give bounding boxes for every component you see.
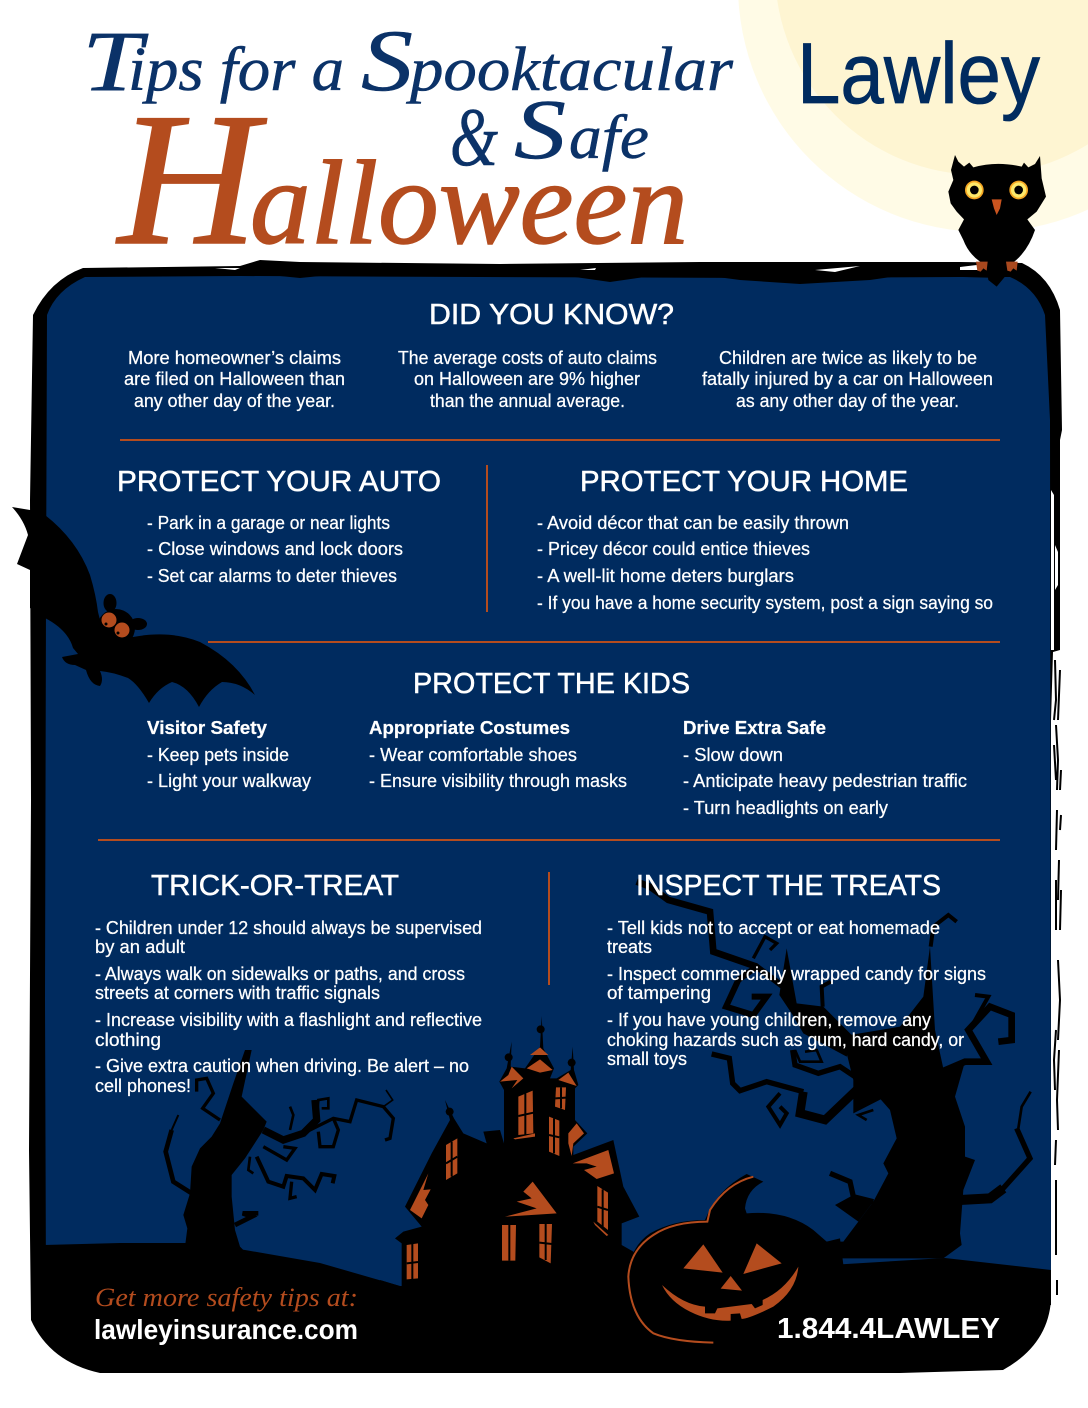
title: & [450,91,498,184]
footer: website call to action: lawleyinsurance.com [94,1314,358,1345]
column: drive extra safe [683,717,967,818]
list: trick-or-treat tips: - Always walk on sidewalks or paths, and cross [95,963,465,984]
list: auto tips: - Close windows and lock doors [147,538,403,559]
column: appropriate costumes [369,717,627,791]
title: H [115,75,267,285]
title: afe [569,104,649,172]
stat: children injured: as any other day of the year. [736,390,959,411]
title: T [82,13,148,109]
column: drive extra safe: - Anticipate heavy pedestrian traffic [683,770,967,791]
column: appropriate costumes: Appropriate Costumes [369,717,570,738]
heading: protect your auto: PROTECT YOUR AUTO [117,466,441,498]
owl [948,155,1046,287]
list: trick-or-treat tips: clothing [95,1029,161,1050]
list: auto tips [147,512,403,586]
column: drive extra safe: - Slow down [683,744,783,765]
jack-o-lantern pumpkin [627,1174,853,1353]
list: trick-or-treat tips [95,917,482,1096]
stat: homeowner claims: are filed on Halloween than [124,368,345,389]
column: visitor safety: - Light your walkway [147,770,312,791]
column: visitor safety: Visitor Safety [147,717,268,738]
column: visitor safety [147,717,312,791]
list: home tips: - A well-lit home deters burglars [537,565,794,586]
logo: Lawley: Lawley [797,26,1040,122]
column: visitor safety: - Keep pets inside [147,744,289,765]
title: S [361,13,413,110]
stat: auto claims: The average costs of auto claims [398,347,657,368]
heading: inspect the treats: INSPECT THE TREATS [636,870,941,902]
stat: auto claims: on Halloween are 9% higher [414,368,640,389]
haunted house [380,1016,647,1333]
list: auto tips: - Park in a garage or near lights [147,512,390,533]
list: trick-or-treat tips: - Children under 12 should always be supervised [95,917,482,938]
column: drive extra safe: - Turn headlights on early [683,797,889,818]
list: inspect the treats tips: - If you have young children, remove any [607,1009,932,1030]
stat: children injured [702,347,993,411]
stat: auto claims: than the annual average. [430,390,625,411]
column: appropriate costumes: - Wear comfortable shoes [369,744,577,765]
column: appropriate costumes: - Ensure visibility through masks [369,770,627,791]
stat: homeowner claims: any other day of the year. [134,390,335,411]
list: trick-or-treat tips: by an adult [95,936,185,957]
stat: auto claims [398,347,657,411]
list: trick-or-treat tips: - Give extra caution when driving. Be alert – no [95,1055,469,1076]
list: auto tips: - Set car alarms to deter thieves [147,565,397,586]
panel: blue board with rough black border [29,260,1062,1373]
left tree silhouette [166,1050,393,1253]
list: home tips: - Pricey décor could entice thieves [537,538,810,559]
list: inspect the treats tips: small toys [607,1048,687,1069]
footer: website call to action: Get more safety tips at: [95,1283,358,1312]
list: inspect the treats tips: - Tell kids not to accept or eat homemade [607,917,940,938]
stat: homeowner claims [124,347,345,411]
heading: protect the kids: PROTECT THE KIDS [413,668,690,700]
stat: children injured: Children are twice as likely to be [719,347,977,368]
column: drive extra safe: Drive Extra Safe [683,717,826,738]
heading: protect your home: PROTECT YOUR HOME [580,466,908,498]
list: trick-or-treat tips: cell phones! [95,1075,191,1096]
stat: homeowner claims: More homeowner’s claims [128,347,341,368]
list: home tips [537,512,993,613]
list: inspect the treats tips: of tampering [607,982,711,1003]
title [82,13,734,285]
list: home tips: - If you have a home security system, post a sign saying so [537,592,993,613]
heading: trick-or-treat: TRICK-OR-TREAT [151,870,399,902]
list: trick-or-treat tips: streets at corners with traffic signals [95,982,380,1003]
title: S [514,81,566,177]
footer: phone number: 1.844.4LAWLEY [777,1313,1000,1345]
list: inspect the treats tips: choking hazards such as gum, hard candy, or [607,1029,964,1050]
title: ips for a [128,36,344,104]
title: alloween [250,136,688,269]
bat [12,507,255,707]
title: pooktacular [406,36,734,104]
right tree silhouette [637,882,1031,1258]
moon [738,0,1088,232]
list: inspect the treats tips [607,917,986,1069]
ground [31,1243,1051,1340]
list: home tips: - Avoid décor that can be easily thrown [537,512,849,533]
footer: website call to action [94,1283,358,1345]
list: inspect the treats tips: - Inspect commercially wrapped candy for signs [607,963,986,984]
list: trick-or-treat tips: - Increase visibility with a flashlight and reflective [95,1009,482,1030]
heading: did you know: DID YOU KNOW? [429,299,674,331]
list: inspect the treats tips: treats [607,936,652,957]
stat: children injured: fatally injured by a car on Halloween [702,368,993,389]
